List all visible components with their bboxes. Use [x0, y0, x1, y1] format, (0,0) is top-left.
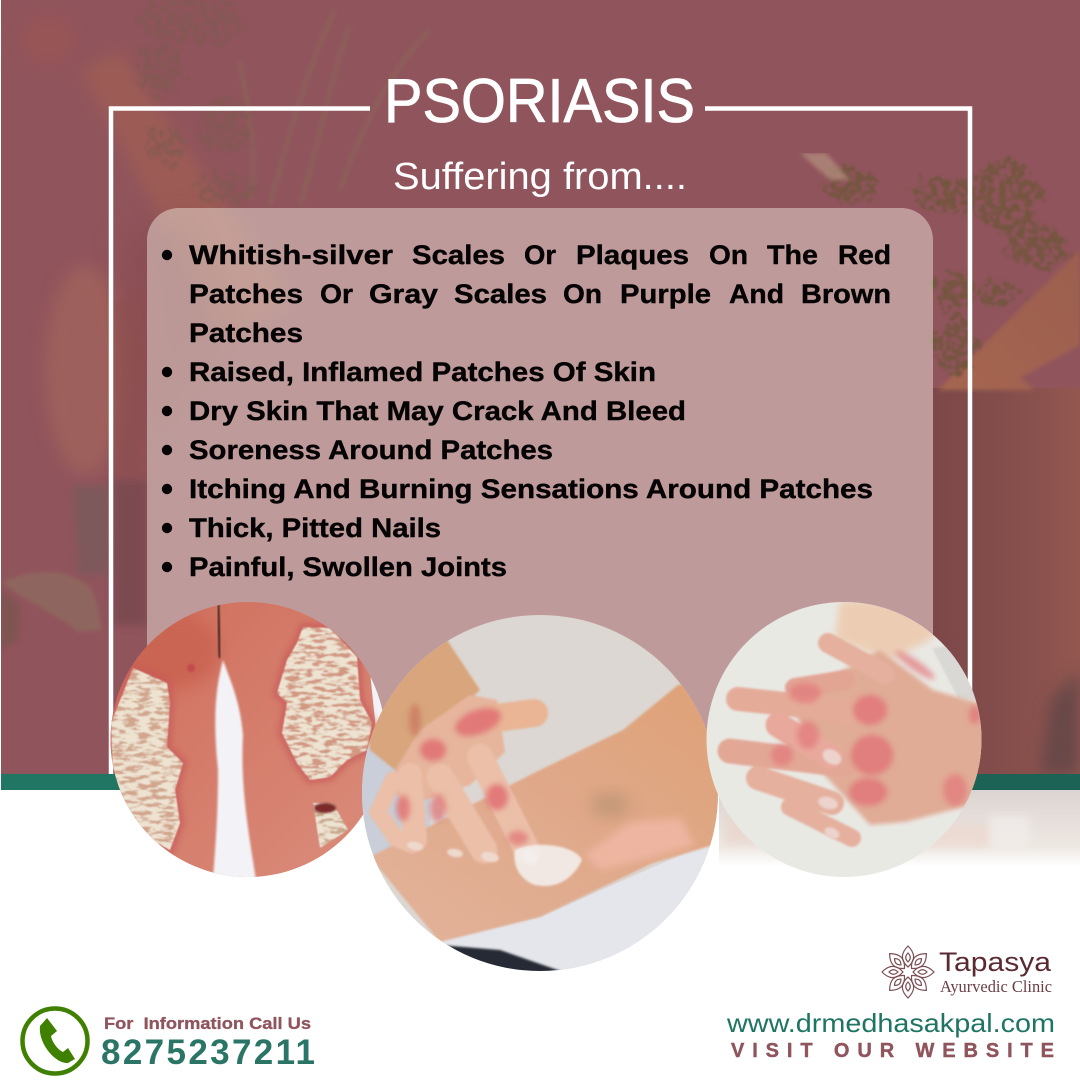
logo name: Tapasya [939, 947, 1052, 977]
bullet item: whitish-silver scales: On [563, 279, 602, 309]
photo: hand applying cream to arm [360, 610, 720, 980]
bullet item: whitish-silver scales: Scales [454, 279, 547, 309]
website url: www.drmedhasakpal.com [726, 1008, 1055, 1038]
icon: mandala flower [882, 946, 934, 998]
logo tagline: Ayurvedic Clinic [940, 977, 1052, 996]
bullet item: whitish-silver scales: On [709, 240, 748, 270]
title: PSORIASIS [384, 67, 695, 136]
visit our website label: VISIT OUR WEBSITE [731, 1040, 1054, 1062]
left scale plaque [111, 668, 183, 850]
phone number: 8275237211 [101, 1033, 315, 1072]
bullet item: whitish-silver scales: Red [838, 240, 891, 270]
faded photo strip [719, 790, 1080, 866]
icon: phone [22, 1008, 88, 1074]
bullet item: whitish-silver scales: And [729, 279, 784, 309]
bullet item: whitish-silver scales: Gray [369, 279, 438, 309]
bullet item: itching: Itching And Burning Sensations Around Patches [189, 474, 873, 504]
bullet item: whitish-silver scales: The [767, 240, 818, 270]
bullet item: whitish-silver scales [162, 240, 891, 348]
bullet item: joints: Painful, Swollen Joints [189, 552, 507, 582]
plaque halos [111, 627, 372, 850]
bullet item: dry skin: Dry Skin That May Crack And Bleed [189, 396, 686, 426]
photo: psoriasis plaques on legs [105, 598, 385, 883]
bullet item: whitish-silver scales: Whitish-silver [189, 240, 394, 270]
bullet item: whitish-silver scales: Purple [620, 279, 711, 309]
teal band [1, 774, 1080, 790]
bullet item: whitish-silver scales: Plaques [576, 240, 689, 270]
background panel [1, 0, 1080, 775]
hand [362, 618, 540, 867]
panel: symptoms card [147, 208, 933, 768]
bullet item: whitish-silver scales: Or [524, 240, 556, 270]
forearm [370, 680, 720, 942]
lower lesion [313, 803, 348, 848]
bullet item: raised patches: Raised, Inflamed Patches Of Skin [189, 357, 656, 387]
bullet item: soreness: Soreness Around Patches [189, 435, 553, 465]
bullet item: nails: Thick, Pitted Nails [189, 513, 441, 543]
photo: hands with lesions [700, 598, 990, 883]
bullet item: whitish-silver scales: Patches [189, 318, 303, 348]
white frame around content [111, 108, 970, 775]
bullet item: whitish-silver scales: Or [320, 279, 354, 309]
bulleted symptom list [162, 240, 891, 582]
subtitle: Suffering from.... [393, 156, 687, 198]
elbow patch [585, 818, 695, 870]
bullet item: whitish-silver scales: Scales [412, 240, 505, 270]
logo: Tapasya Ayurvedic Clinic [882, 946, 1052, 998]
bullet item: whitish-silver scales: Brown [801, 279, 891, 309]
bullet item: whitish-silver scales: Patches [189, 279, 303, 309]
cream smear [514, 845, 582, 886]
right scale plaque [277, 627, 372, 780]
call to action label: For Information Call Us [104, 1014, 311, 1033]
